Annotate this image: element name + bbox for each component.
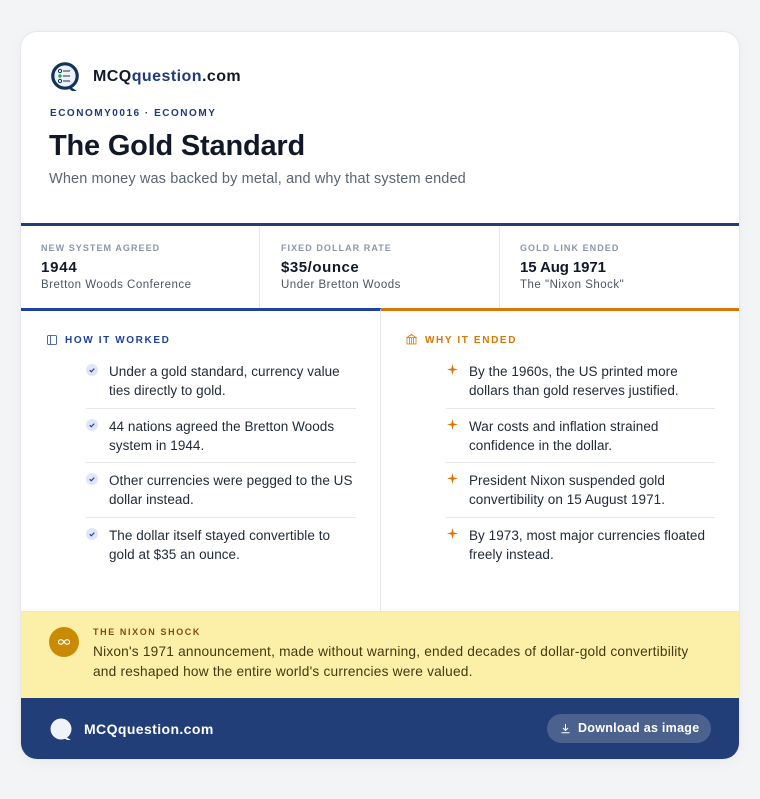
category tag: ECONOMY0016 · ECONOMY	[50, 108, 216, 119]
logo icon	[51, 62, 79, 91]
stat: gold link ended	[520, 243, 624, 291]
icon: book	[47, 335, 57, 345]
item 2	[469, 419, 658, 453]
item 4	[109, 528, 330, 562]
stats strip	[21, 223, 739, 308]
list: why it ended	[446, 364, 715, 562]
item 3: convertibility on 15 August 1971.	[469, 492, 665, 507]
item 2: system in 1944.	[109, 438, 204, 453]
button label: Download as image	[578, 721, 699, 735]
item 2: War costs and inflation strained	[469, 419, 658, 434]
item 3: dollar instead.	[109, 492, 194, 507]
icon: download	[562, 724, 570, 734]
stat: new system agreed: Bretton Woods Conference	[41, 279, 192, 291]
stat: fixed dollar rate: $35/ounce	[281, 259, 359, 276]
item 3: Other currencies were pegged to the US	[109, 473, 353, 488]
item 1	[109, 364, 340, 398]
item 1: ties directly to gold.	[109, 383, 226, 398]
item 1	[469, 364, 679, 398]
stat: new system agreed	[41, 243, 192, 291]
stat: gold link ended: The "Nixon Shock"	[520, 279, 624, 291]
panel: how it worked	[21, 308, 381, 611]
stat: gold link ended: GOLD LINK ENDED	[520, 243, 619, 253]
callout text	[93, 644, 688, 679]
item 3	[109, 473, 353, 507]
brand name: MCQquestion.com	[93, 68, 241, 85]
heading: how it worked: HOW IT WORKED	[65, 335, 170, 346]
callout band	[21, 611, 739, 698]
stat: fixed dollar rate: Under Bretton Woods	[281, 279, 401, 291]
footer brand: MCQquestion.com	[84, 721, 214, 737]
download button	[547, 714, 711, 743]
item 2: confidence in the dollar.	[469, 438, 612, 453]
title: The Gold Standard	[49, 130, 305, 162]
item 1: By the 1960s, the US printed more	[469, 364, 678, 379]
stat: fixed dollar rate: FIXED DOLLAR RATE	[281, 243, 392, 253]
item 2: 44 nations agreed the Bretton Woods	[109, 419, 334, 434]
item 2	[109, 419, 334, 453]
stat: gold link ended: 15 Aug 1971	[520, 259, 606, 276]
stat: new system agreed: NEW SYSTEM AGREED	[41, 243, 160, 253]
item 4	[469, 528, 705, 562]
item 4: The dollar itself stayed convertible to	[109, 528, 330, 543]
item 4: gold at $35 an ounce.	[109, 547, 240, 562]
icon: infinity badge	[49, 627, 79, 657]
icon: bank	[406, 334, 417, 344]
item 1: Under a gold standard, currency value	[109, 364, 340, 379]
callout heading: THE NIXON SHOCK	[93, 627, 201, 637]
item 1: dollars than gold reserves justified.	[469, 383, 679, 398]
subtitle: When money was backed by metal, and why that system ended	[49, 171, 466, 187]
footer band	[21, 698, 739, 759]
callout text: Nixon's 1971 announcement, made without warning, ended decades of dollar-gold convertibility	[93, 644, 688, 659]
icon: footer logo	[50, 718, 72, 740]
item 4: freely instead.	[469, 547, 554, 562]
item 3: President Nixon suspended gold	[469, 473, 665, 488]
item 4: By 1973, most major currencies floated	[469, 528, 705, 543]
list: how it worked	[86, 364, 356, 562]
heading: why it ended: WHY IT ENDED	[425, 335, 517, 346]
stat: fixed dollar rate	[281, 243, 401, 291]
callout text: and reshaped how the entire world's currencies were valued.	[93, 664, 473, 679]
stat: new system agreed: 1944	[41, 259, 78, 276]
item 3	[469, 473, 665, 507]
panel: why it ended	[381, 308, 739, 611]
